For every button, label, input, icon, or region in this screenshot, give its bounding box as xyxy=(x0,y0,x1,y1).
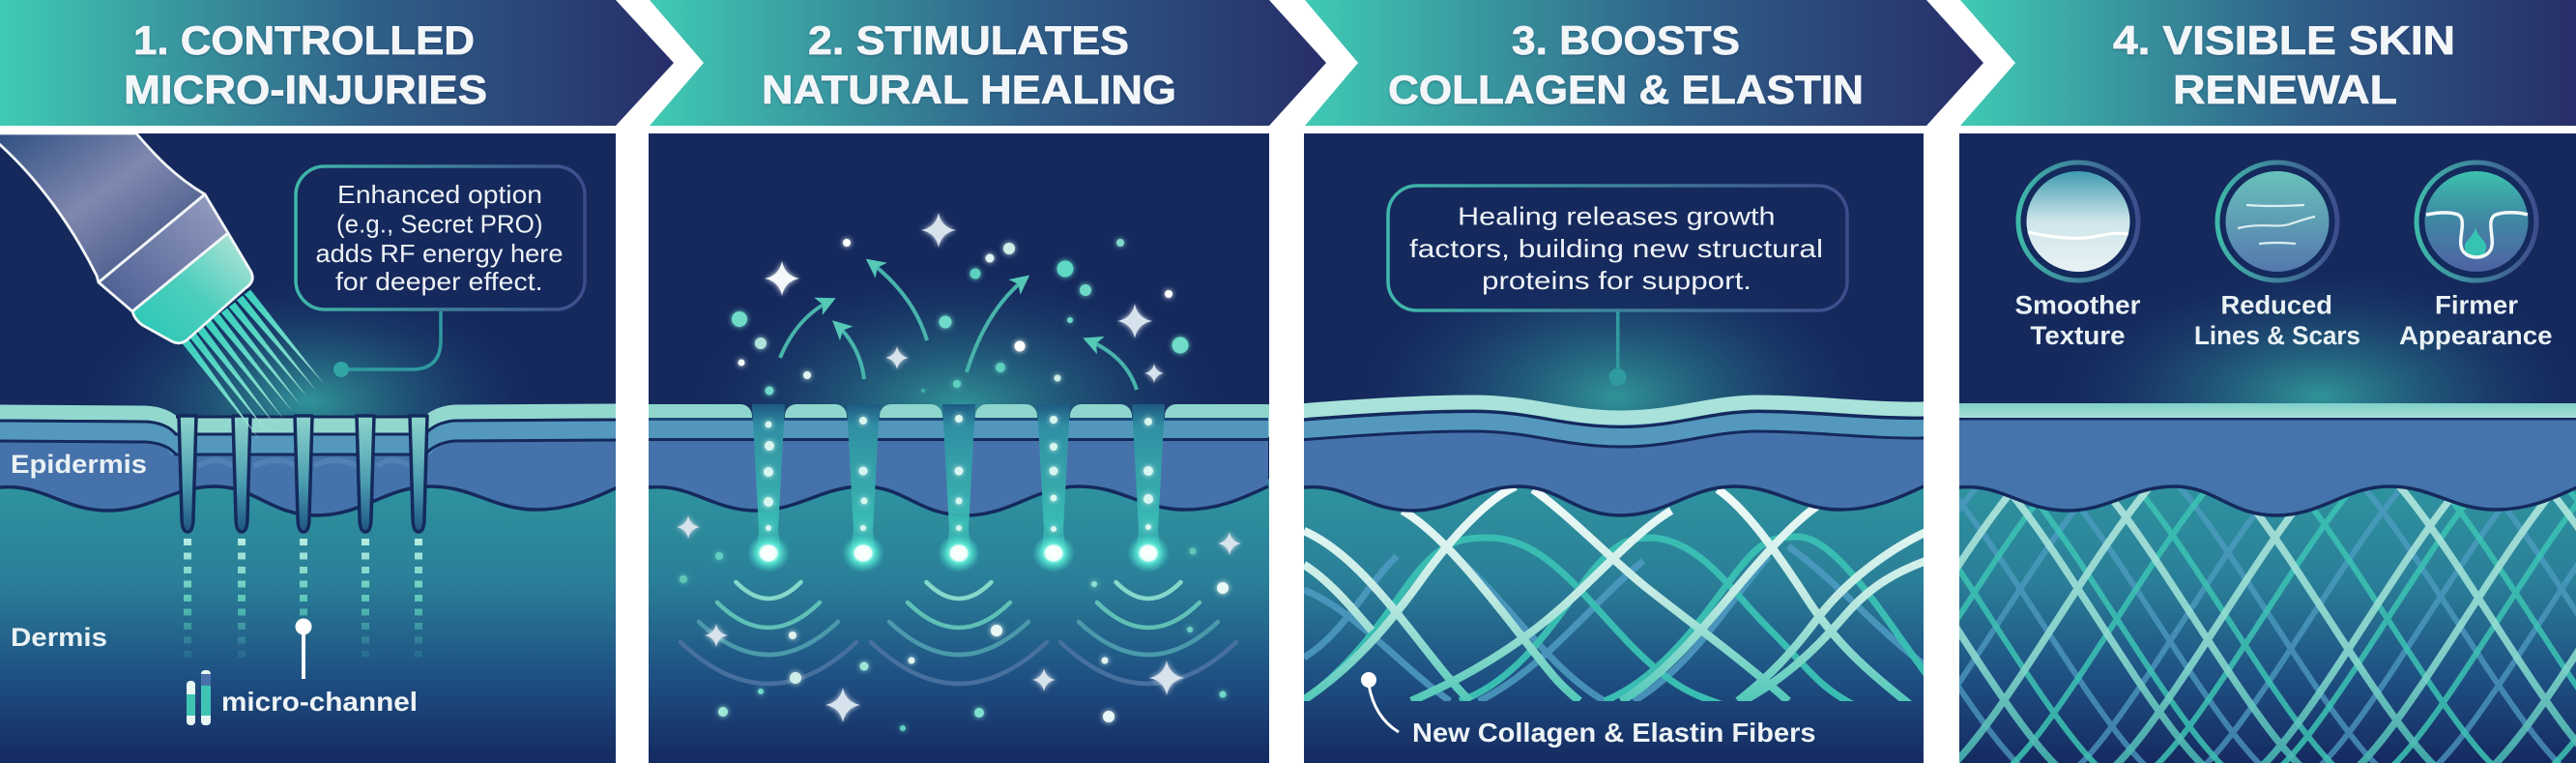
icon: reduced lines xyxy=(2217,162,2337,280)
epidermis layer xyxy=(0,411,620,515)
callout: growth factors: factors, building new structural xyxy=(1409,234,1823,263)
needle channels xyxy=(179,416,427,532)
floating particles xyxy=(680,239,1229,731)
icon: needle rays xyxy=(182,290,325,440)
callout: RF energy: Enhanced option xyxy=(337,180,542,209)
icon: handpiece xyxy=(0,133,252,343)
label: reduced lines and scars: Lines & Scars xyxy=(2194,321,2360,350)
label: smoother texture: Texture xyxy=(2030,321,2125,350)
header 3: boosts collagen and elastin: 3. BOOSTS xyxy=(1512,17,1740,63)
icon: firmer appearance xyxy=(2417,162,2536,280)
sparkles xyxy=(677,213,1241,722)
dermis layer xyxy=(1959,479,2576,763)
skin segments xyxy=(639,404,1278,515)
label: reduced lines and scars: Reduced xyxy=(2221,290,2332,319)
label: firmer appearance: Appearance xyxy=(2399,321,2552,350)
header 2: stimulates natural healing: 2. STIMULATES xyxy=(808,17,1129,63)
panel 1: micro-injuries xyxy=(0,133,620,763)
label: firmer appearance xyxy=(2399,290,2552,350)
glowing channels xyxy=(752,404,1165,553)
label: micro-channel: micro-channel xyxy=(221,687,418,717)
label pointer: fibers xyxy=(1361,672,1399,732)
dashed micro-channel traces xyxy=(188,539,419,658)
callout: growth factors xyxy=(1388,186,1847,386)
header 2: stimulates natural healing xyxy=(650,0,1326,126)
callout: RF energy: adds RF energy here xyxy=(315,239,563,268)
glowing healing nodes xyxy=(747,534,1170,572)
header 1: controlled micro-injuries: MICRO-INJURIES xyxy=(124,67,487,112)
header 3: boosts collagen and elastin xyxy=(1305,0,1983,126)
panel 3: collagen and elastin xyxy=(1295,133,1928,763)
header 1: controlled micro-injuries xyxy=(0,0,674,126)
callout: growth factors: Healing releases growth xyxy=(1458,201,1775,230)
rising arrows xyxy=(780,261,1137,390)
dermis layer xyxy=(0,479,616,763)
label: smoother texture: Smoother xyxy=(2014,290,2141,319)
callout: RF energy: for deeper effect. xyxy=(335,267,543,296)
label: firmer appearance: Firmer xyxy=(2435,290,2518,319)
callout: RF energy xyxy=(296,166,585,377)
panel 2: natural healing xyxy=(639,133,1278,763)
panel 4: skin renewal xyxy=(1959,133,2576,763)
header 4: visible skin renewal xyxy=(1960,0,2576,126)
label: dermis: Dermis xyxy=(11,623,107,652)
skin layers xyxy=(1299,402,1928,515)
dermis layer xyxy=(649,479,1269,763)
icon: vials xyxy=(187,670,211,725)
icon: smoother texture xyxy=(2018,162,2138,280)
healing wave arcs xyxy=(680,582,1236,684)
callout: RF energy: (e.g., Secret PRO) xyxy=(336,209,543,238)
dermis layer xyxy=(1304,479,1924,763)
header 3: boosts collagen and elastin: COLLAGEN & ELASTIN xyxy=(1388,67,1864,112)
collagen and elastin fibers xyxy=(1295,486,1928,716)
header 1: controlled micro-injuries: 1. CONTROLLED xyxy=(133,17,475,63)
label: reduced lines and scars xyxy=(2196,295,2359,344)
dense fiber lattice xyxy=(1959,488,2576,763)
header 2: stimulates natural healing: NATURAL HEALING xyxy=(762,67,1176,112)
callout: growth factors: proteins for support. xyxy=(1482,266,1751,295)
skin layers xyxy=(1959,403,2576,515)
label: new fibers: New Collagen & Elastin Fibers xyxy=(1412,718,1815,748)
rising particle dots in channels xyxy=(764,415,1153,532)
label: smoother texture xyxy=(2015,295,2140,344)
header 4: visible skin renewal: 4. VISIBLE SKIN xyxy=(2113,17,2455,63)
label: epidermis: Epidermis xyxy=(11,450,147,479)
micro-channel pin xyxy=(296,619,311,679)
header 4: visible skin renewal: RENEWAL xyxy=(2173,67,2397,112)
